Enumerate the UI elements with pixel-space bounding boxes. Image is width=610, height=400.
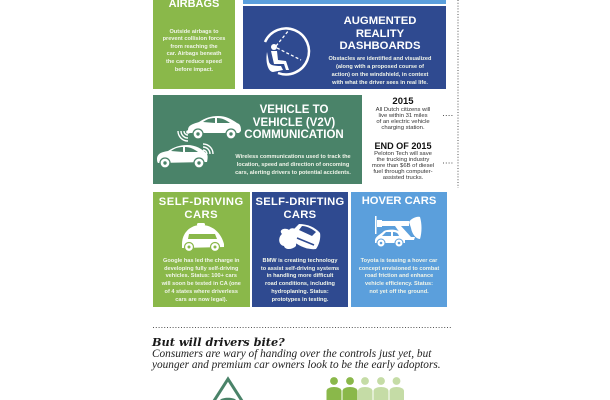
text: augmented reality description: with what the driver sees in real life.	[332, 80, 428, 86]
text block: end of 2015 milestone: more than $6B of diesel	[372, 162, 434, 168]
text: self-driving description: cars are now legal).	[175, 297, 227, 303]
heading: vehicle to vehicle communication	[244, 104, 344, 141]
heading: augmented reality dashboards	[340, 15, 420, 52]
text: self-driving description: Google has led the charge in	[163, 258, 239, 264]
panel: top light blue strip	[243, 0, 446, 4]
heading: self-driving cars: SELF-DRIVING	[159, 196, 244, 208]
text: airbags description: Outside airbags to	[169, 28, 219, 34]
text: self-drifting description: BMW is creating technology	[263, 258, 337, 264]
text: self-drifting description: hydroplaning. Status:	[271, 289, 329, 295]
icon: five people pictogram	[326, 377, 404, 400]
text: airbags description: car. Airbags beneath	[167, 51, 221, 57]
text block: end of 2015 milestone: fuel through computer-	[373, 168, 433, 174]
text: airbags description: before impact.	[175, 67, 213, 73]
text: self-drifting description: road conditions, including	[265, 281, 335, 287]
text block: end of 2015 milestone: END OF 2015	[374, 141, 432, 151]
heading: self-drifting cars	[255, 196, 345, 221]
text: augmented reality description: Obstacles are identified and visualized	[329, 56, 431, 62]
text: consumers intro: Consumers are wary of handing over the controls just yet, but	[152, 348, 431, 360]
heading: augmented reality dashboards: AUGMENTED	[344, 15, 416, 27]
text: self-driving description: developing fully self-driving	[164, 266, 238, 272]
heading: self-drifting cars: CARS	[284, 209, 316, 221]
panel: augmented reality dashboards	[243, 6, 446, 89]
icon: green triangle	[212, 376, 244, 400]
text: self-driving description: vehicles. Status: 100+ cars	[166, 273, 237, 279]
text: augmented reality description	[328, 56, 432, 86]
text: airbags description	[163, 28, 226, 73]
text block: 2015 milestone: live within 31 miles	[378, 113, 428, 119]
text: self-drifting description: prototypes in testing.	[272, 297, 328, 303]
text: hover cars description	[359, 258, 440, 295]
heading: self-driving cars: CARS	[184, 209, 218, 221]
heading: self-drifting cars: SELF-DRIFTING	[255, 196, 345, 208]
text: augmented reality description: (along with a proposed course of	[336, 64, 424, 70]
icon: drifting car with smoke	[279, 224, 320, 250]
text: self-drifting description: in handling more difficult	[267, 273, 333, 279]
panel: self-driving cars	[153, 192, 250, 307]
text: self-drifting description: to assist self-driving systems	[261, 266, 339, 272]
heading: vehicle to vehicle communication: VEHICLE (V2V)	[253, 116, 335, 128]
heading: vehicle to vehicle communication: VEHICLE TO	[260, 104, 328, 116]
text block: 2015 milestone	[376, 96, 430, 131]
text: consumers intro: younger and premium car owners look to be the early adoptors.	[152, 359, 441, 371]
heading: augmented reality dashboards: DASHBOARDS	[340, 40, 420, 52]
text block: 2015 milestone: of an electric vehicle	[376, 119, 430, 125]
icon: hover car	[375, 216, 422, 246]
text: self-drifting description	[260, 258, 339, 303]
text: consumers intro	[151, 348, 441, 371]
text: self-driving description: will soon be tested in CA (one	[162, 281, 241, 287]
icon: two connected cars	[157, 116, 241, 168]
text block: end of 2015 milestone	[372, 141, 434, 180]
text: augmented reality description: action) on the windshield, in context	[332, 72, 428, 78]
icon: driver in windshield view	[264, 27, 310, 76]
text: self-driving description	[162, 258, 241, 303]
text: v2v description: Wireless communications used to track the	[235, 154, 351, 160]
text: airbags description: from reaching the	[170, 44, 218, 50]
panel: airbags	[153, 0, 235, 89]
text: hover cars description: road friction and enhance	[365, 273, 433, 279]
heading: but will drivers bite: But will drivers bite?	[152, 334, 285, 348]
heading: self-driving cars	[159, 196, 244, 221]
panel: vehicle to vehicle communication	[153, 95, 362, 184]
text block: end of 2015 milestone: assisted trucks.	[383, 174, 423, 180]
text: v2v description	[235, 154, 351, 176]
text block: end of 2015 milestone: the trucking industry	[377, 156, 429, 162]
text: airbags description: the car reduce speed	[166, 59, 222, 65]
text: hover cars description: concept envisioned to combat	[359, 266, 439, 272]
text: v2v description: cars, alerting drivers to potential accidents.	[235, 170, 351, 176]
text: hover cars description: vehicle efficiency. Status:	[365, 281, 433, 287]
text block: end of 2015 milestone: Peloton Tech will save	[374, 150, 432, 156]
text block: 2015 milestone: 2015	[392, 96, 414, 107]
text block: 2015 milestone: charging station.	[381, 125, 425, 131]
text: self-driving description: of 4 states where driverless	[165, 289, 238, 295]
heading: augmented reality dashboards: REALITY	[356, 28, 404, 40]
panel: self-drifting cars	[252, 192, 348, 307]
text block: 2015 milestone: All Dutch citizens will	[376, 106, 430, 112]
text: v2v description: location, speed and direction of oncoming	[237, 162, 349, 168]
text: hover cars description: Toyota is teasing a hover car	[361, 258, 437, 264]
panel: hover cars	[351, 192, 447, 307]
heading: vehicle to vehicle communication: COMMUNICATION	[244, 129, 344, 141]
text: airbags description: prevent collision forces	[163, 36, 225, 42]
text: hover cars description: not yet off the ground.	[369, 289, 429, 295]
icon: self-driving car	[182, 223, 224, 251]
heading: hover cars: HOVER CARS	[362, 195, 436, 207]
